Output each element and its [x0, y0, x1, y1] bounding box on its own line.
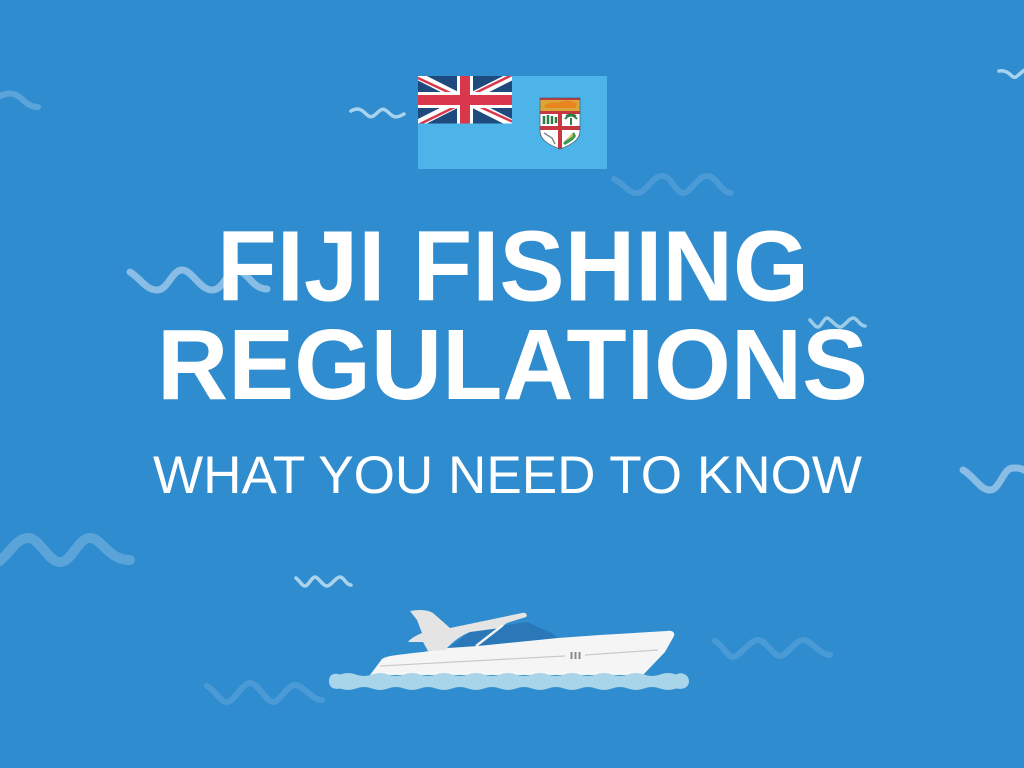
water under the boat [329, 673, 689, 690]
yacht hull [370, 631, 674, 675]
illustration: white motor yacht on water [329, 610, 689, 690]
yacht radar arch [408, 610, 527, 651]
yacht windshield [446, 622, 560, 652]
subtitle: WHAT YOU NEED TO KNOW [153, 446, 862, 505]
yacht hull stripe [380, 650, 658, 666]
yacht windshield strut [476, 625, 503, 646]
flag of Fiji [414, 74, 607, 169]
yacht vents [572, 652, 580, 659]
union jack canton [418, 76, 512, 124]
coat of arms shield [540, 98, 580, 149]
flag field [418, 76, 607, 169]
title line 2: REGULATIONS [157, 309, 868, 421]
title line 1: FIJI FISHING [217, 210, 809, 322]
title [157, 210, 868, 421]
